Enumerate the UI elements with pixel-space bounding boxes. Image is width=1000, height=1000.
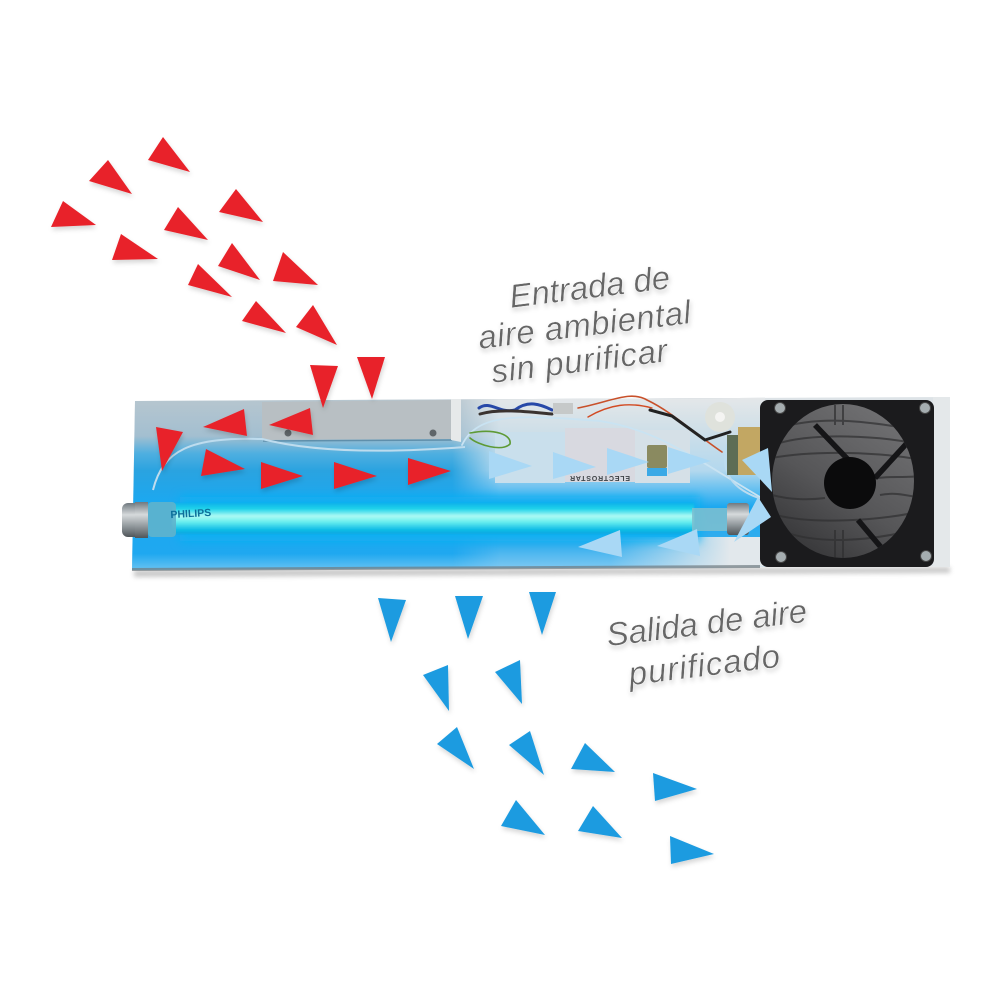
wires left — [153, 439, 465, 490]
device panel — [122, 395, 950, 577]
blue arrows: purified air out — [378, 592, 714, 864]
bolts — [774, 402, 932, 562]
lamp label: PHILIPS — [170, 507, 212, 521]
ballast brand: ELECTROSTAR — [570, 474, 630, 481]
text: entrada de aire ambiental sin purificar — [476, 258, 694, 390]
motor — [705, 402, 735, 432]
text: salida de aire purificado — [604, 592, 809, 692]
fan — [760, 397, 950, 567]
text: entrada de aire ambiental sin purificar: sin purificar — [489, 331, 671, 390]
fan hub — [824, 457, 876, 509]
red arrows: unpurified air in — [51, 137, 451, 489]
terminal block — [553, 403, 573, 414]
wiring — [462, 396, 765, 500]
panel plate — [125, 395, 950, 577]
text: salida de aire purificado: Salida de aire — [604, 592, 809, 653]
text: entrada de aire ambiental sin purificar: Entrada de — [507, 258, 672, 315]
ballast — [495, 428, 690, 483]
cover box — [262, 399, 461, 442]
transformer — [727, 427, 762, 475]
light blue arrows: air inside device — [489, 447, 772, 557]
UV lamp — [122, 502, 749, 538]
text: salida de aire purificado: purificado — [625, 637, 783, 692]
lamp glow — [180, 497, 700, 541]
text: entrada de aire ambiental sin purificar: aire ambiental — [476, 293, 694, 356]
